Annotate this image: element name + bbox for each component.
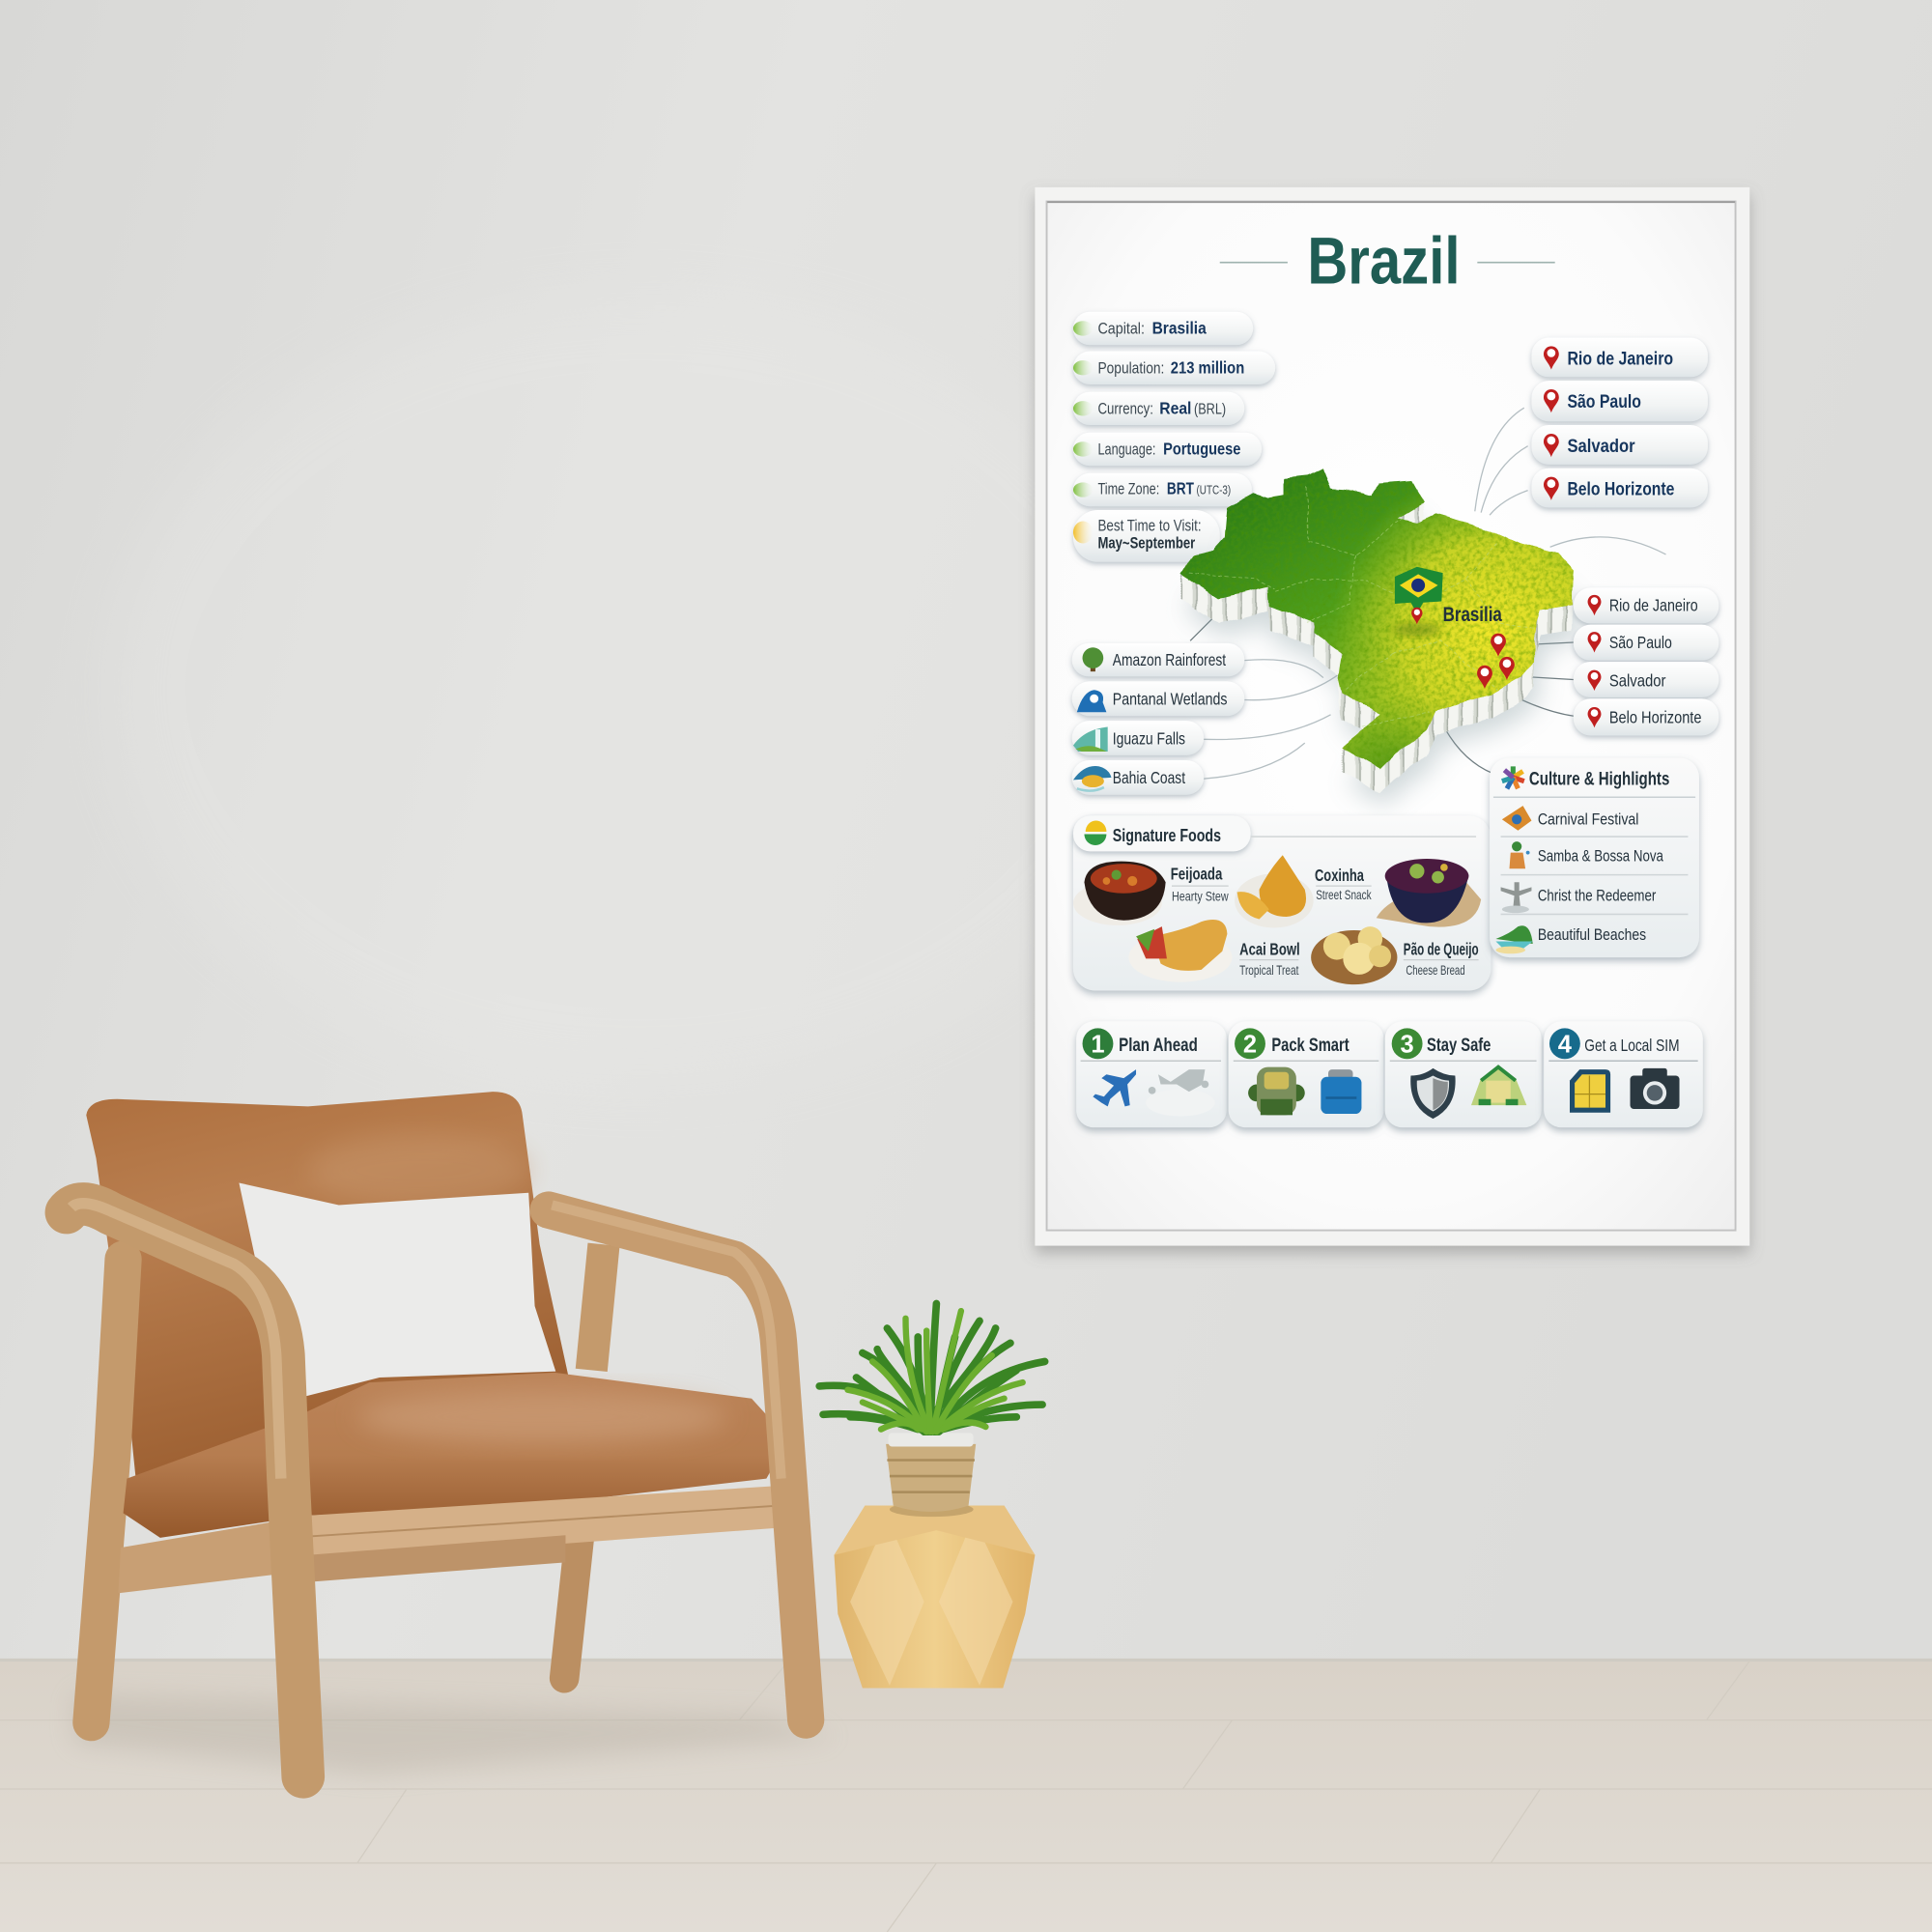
city pill: Rio de Janeiro [1531, 337, 1708, 377]
fact: best time to visit [1073, 510, 1220, 562]
item: carnival festival: Carnival Festival [1538, 810, 1638, 828]
fact: currency: (BRL) [1194, 402, 1226, 418]
attraction: Iguazu Falls: Iguazu Falls [1113, 728, 1185, 748]
poster frame [1035, 187, 1749, 1246]
fact: currency: Currency: [1097, 400, 1153, 418]
fact: capital [1073, 312, 1253, 345]
item: christ the redeemer: Christ the Redeemer [1538, 886, 1657, 904]
fact: time zone [1073, 473, 1252, 506]
fact: language: Portuguese [1163, 440, 1240, 459]
icon: grey world map [1146, 1069, 1215, 1117]
city pill: Belo Horizonte: Belo Horizonte [1567, 479, 1674, 500]
rear legs [91, 1260, 124, 1722]
tip 3: stay safe: 3 [1401, 1031, 1414, 1058]
panel: culture and highlights: Culture & Highlights [1529, 769, 1669, 789]
city pill: Salvador: Salvador [1609, 670, 1666, 690]
food: feijoada: Hearty Stew [1172, 888, 1229, 903]
food: feijoada [1073, 862, 1229, 925]
icon: backpack [1248, 1067, 1305, 1115]
food: coxinha: Coxinha [1315, 866, 1365, 885]
fact: time zone: BRT [1167, 478, 1194, 497]
city pill: São Paulo [1531, 381, 1708, 421]
panel: signature foods [1073, 815, 1491, 991]
city pill: Salvador [1574, 662, 1719, 697]
tip 2: pack smart: Pack Smart [1271, 1036, 1350, 1056]
floor shadow of chair [74, 1694, 838, 1775]
back cushion [86, 1092, 569, 1476]
tip 2: pack smart [1229, 1021, 1383, 1127]
attraction: Amazon Rainforest: Amazon Rainforest [1113, 650, 1226, 669]
item: samba and bossa nova [1509, 841, 1664, 868]
attraction: Bahia Coast: Bahia Coast [1113, 768, 1185, 787]
food: pao de queijo: Pão de Queijo [1404, 940, 1479, 959]
fact pills [1073, 312, 1275, 562]
item: christ the redeemer [1501, 882, 1657, 913]
food: pao de queijo [1311, 926, 1479, 984]
lower city list [1574, 587, 1719, 735]
city pill: Rio de Janeiro: Rio de Janeiro [1609, 596, 1698, 615]
tip 3: stay safe [1385, 1021, 1542, 1127]
item: beautiful beaches [1495, 925, 1646, 953]
city pill: Belo Horizonte: Belo Horizonte [1609, 708, 1701, 727]
city pins on map [1477, 634, 1515, 689]
panel: culture and highlights [1490, 757, 1699, 957]
fact: time zone: (UTC-3) [1197, 482, 1231, 497]
city pill: Salvador: Salvador [1567, 436, 1635, 457]
attraction: Pantanal Wetlands: Pantanal Wetlands [1113, 690, 1227, 709]
fact: capital: Capital: [1097, 320, 1145, 338]
fact: best time to visit: Best Time to Visit: [1097, 517, 1202, 535]
fact: best time to visit: May~September [1097, 534, 1196, 553]
potted plant [819, 1303, 1045, 1517]
food: coxinha [1235, 855, 1372, 927]
attraction: Bahia Coast [1072, 760, 1204, 795]
heading pill: signature foods [1073, 815, 1251, 851]
icon: pinwheel [1502, 766, 1524, 788]
city pill: São Paulo: São Paulo [1567, 391, 1641, 412]
food: feijoada: Feijoada [1171, 865, 1223, 884]
title: Brazil [1307, 223, 1460, 298]
city pill: São Paulo: São Paulo [1609, 633, 1672, 652]
city pill: Belo Horizonte [1531, 469, 1708, 508]
tip 3: stay safe: Stay Safe [1427, 1036, 1491, 1056]
city pill: São Paulo [1574, 625, 1719, 661]
fact: currency [1073, 392, 1244, 425]
fact: currency: Real [1159, 399, 1191, 418]
arms and front legs [67, 1204, 303, 1776]
tip 4: get a local SIM [1544, 1021, 1703, 1127]
fact: population: Population: [1097, 358, 1164, 377]
armchair [67, 1092, 838, 1776]
Brasilia marker with flag: Brasilia [1443, 604, 1502, 626]
map pin shadow patch [1392, 623, 1441, 636]
fact: language: Language: [1097, 440, 1155, 459]
attraction: Iguazu Falls [1072, 721, 1204, 755]
tip 4: get a local SIM: 4 [1558, 1031, 1573, 1058]
attraction: Pantanal Wetlands [1072, 681, 1244, 716]
item: carnival festival [1502, 806, 1638, 831]
map relief surface [1180, 469, 1574, 793]
connector lines [1190, 408, 1665, 779]
upper city list [1531, 337, 1708, 508]
side table stool [835, 1506, 1035, 1688]
Brasilia marker with flag [1395, 567, 1502, 626]
icon: airplane [1093, 1069, 1136, 1106]
food: acai bowl [1239, 859, 1481, 978]
icon: SIM card [1570, 1069, 1610, 1113]
heading pill: signature foods: Signature Foods [1113, 825, 1221, 845]
tip 4: get a local SIM: Get a Local SIM [1584, 1036, 1680, 1055]
city pill: Rio de Janeiro [1574, 587, 1719, 623]
item: beautiful beaches: Beautiful Beaches [1538, 925, 1646, 944]
fact: population [1073, 352, 1275, 384]
nature attractions [1072, 643, 1244, 795]
fact: time zone: Time Zone: [1097, 479, 1159, 497]
icon: blue bag [1321, 1069, 1361, 1114]
tip 1: plan ahead: 1 [1091, 1031, 1105, 1058]
food: coxinha: Street Snack [1316, 887, 1372, 902]
city pill: Rio de Janeiro: Rio de Janeiro [1567, 349, 1673, 370]
wooden floor [0, 1659, 1932, 1932]
attraction: Amazon Rainforest [1072, 643, 1244, 676]
food: acai bowl: Acai Bowl [1239, 940, 1300, 959]
icon: shield [1410, 1068, 1456, 1119]
map of Brazil [1180, 469, 1578, 806]
fact: population: 213 million [1171, 357, 1244, 377]
tip 1: plan ahead [1076, 1021, 1227, 1127]
city pill: Belo Horizonte [1574, 698, 1719, 735]
seat rails [308, 1486, 779, 1562]
tip 2: pack smart: 2 [1243, 1031, 1257, 1058]
food: wrap plate [1128, 920, 1233, 982]
icon: green lodge [1471, 1067, 1526, 1105]
item: samba and bossa nova: Samba & Bossa Nova [1538, 847, 1664, 866]
travel tips [1076, 1021, 1703, 1127]
map ground shadow [1185, 505, 1578, 806]
fact: language [1073, 433, 1262, 466]
fact: capital: Brasilia [1152, 319, 1208, 338]
food: acai bowl: Tropical Treat [1239, 962, 1298, 978]
city pill: Salvador [1531, 425, 1708, 465]
white pillow [239, 1182, 555, 1397]
icon: camera [1631, 1068, 1680, 1109]
seat cushion [124, 1373, 788, 1538]
tip 1: plan ahead: Plan Ahead [1119, 1036, 1198, 1056]
food: pao de queijo: Cheese Bread [1406, 962, 1465, 978]
